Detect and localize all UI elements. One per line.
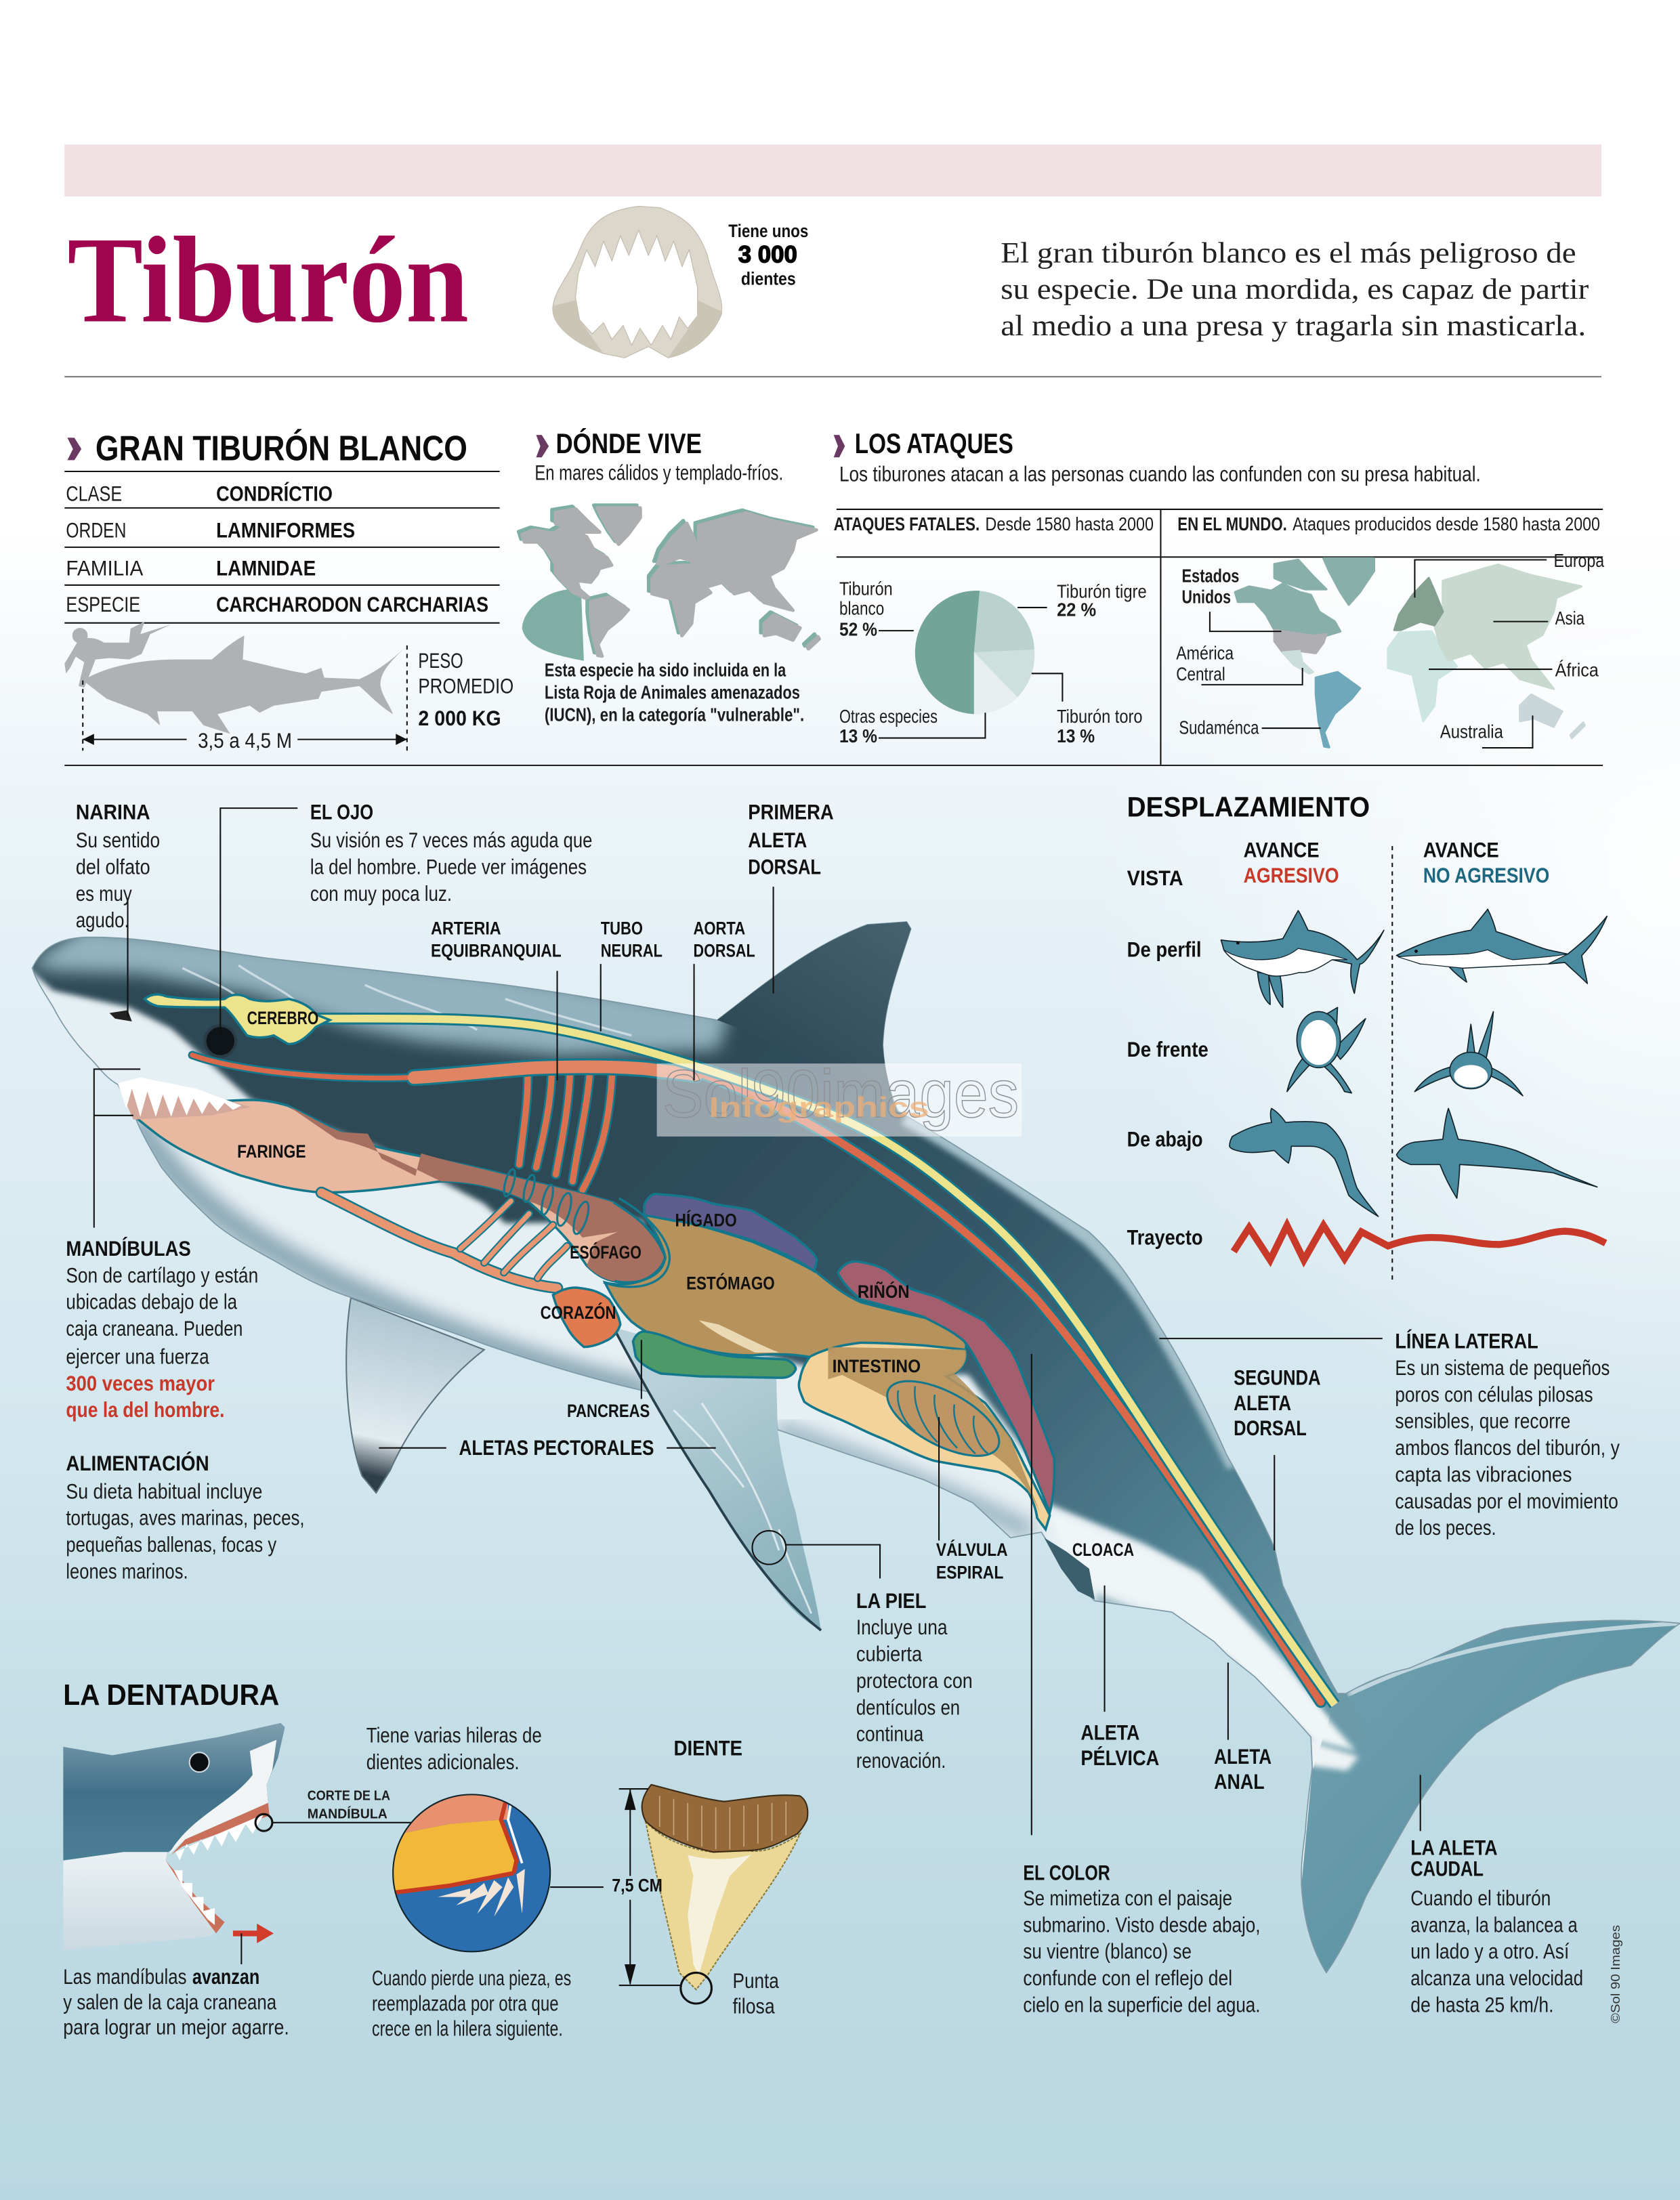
organ: stomach (605, 1215, 966, 1376)
organ: heart (553, 1288, 621, 1347)
column headers: AGRESIVO (1244, 864, 1339, 887)
label: aleta pelvica: PÉLVICA (1080, 1746, 1159, 1770)
subheading: Los tiburones atacan a las personas cuando las confunden con su presa habitual. (839, 463, 1481, 486)
label: tubo neural (601, 918, 663, 961)
row labels: De perfil (1127, 938, 1202, 962)
teeth count note (728, 221, 808, 289)
panel: desplazamiento (1127, 791, 1607, 1279)
heading: LA DENTADURA (63, 1679, 279, 1712)
organ: faringe brown (288, 1105, 664, 1282)
callout: linea lateral: Es un sistema de pequeños (1395, 1356, 1610, 1380)
label: primera aleta dorsal: DORSAL (748, 855, 821, 879)
callout: mandibulas: 300 veces mayor (66, 1372, 215, 1395)
callout: la aleta caudal: de hasta 25 km/h. (1410, 1993, 1554, 2016)
watermark: Sol90images (663, 1057, 1019, 1132)
callout: linea lateral: LÍNEA LATERAL (1395, 1330, 1538, 1353)
callout: la piel (856, 1589, 973, 1773)
row labels: Trayecto (1127, 1225, 1203, 1249)
callout: la aleta caudal (1410, 1836, 1583, 2016)
body outline (33, 922, 1680, 1972)
callout: el color (1023, 1861, 1261, 2016)
callout: alimentacion: Su dieta habitual incluye (66, 1479, 262, 1503)
organ: lower gill arches (321, 1193, 567, 1288)
pie label: tiburon toro: 13 % (1057, 725, 1095, 746)
map labels: Asia (1555, 608, 1584, 629)
organ: kidney (838, 1261, 1055, 1512)
callout: linea lateral (1395, 1330, 1620, 1540)
pie label: otras especies (839, 706, 938, 746)
organ labels: PANCREAS (567, 1401, 650, 1421)
callout: alimentacion: ALIMENTACIÓN (66, 1451, 209, 1475)
tooth text: rows: Tiene varias hileras de (366, 1724, 542, 1748)
label: aleta pelvica (1080, 1721, 1159, 1770)
callout: alimentacion (66, 1451, 305, 1583)
label: valvula espiral (936, 1540, 1008, 1582)
shark head illustration (63, 1723, 285, 1950)
icon: shark jaw (553, 206, 722, 358)
size dimension (83, 646, 407, 753)
callout: linea lateral: sensibles, que recorre (1395, 1410, 1570, 1433)
organ labels: HÍGADO (675, 1210, 737, 1230)
panel: la dentadura (63, 1679, 807, 2041)
text: jaws advance: para lograr un mejor agarre. (63, 2016, 289, 2039)
white rear belly (1050, 1512, 1356, 1751)
text: tooth replacement: crece en la hilera siguiente. (372, 2017, 563, 2041)
teeth count note: Tiene unos (728, 221, 808, 241)
map labels: Estados (1181, 566, 1239, 587)
mouth and teeth (118, 1078, 251, 1120)
red list note (545, 659, 804, 725)
icon: non aggressive front (1414, 1012, 1523, 1096)
heading: DESPLAZAMIENTO (1127, 791, 1370, 823)
callout: mandibulas: MANDÍBULAS (66, 1237, 191, 1261)
row labels: De frente (1127, 1038, 1209, 1061)
callout: alimentacion: leones marinos. (66, 1559, 188, 1583)
pie label: tiburon blanco: 52 % (839, 618, 877, 639)
pie label: tiburon tigre: Tiburón tigre (1057, 580, 1147, 601)
taxonomy table: FAMILIA (66, 556, 144, 580)
weight: PROMEDIO (418, 674, 513, 698)
main shark illustration (0, 898, 1680, 1992)
column headers: AVANCE (1244, 839, 1320, 862)
tooth heading: DIENTE (673, 1736, 742, 1760)
arrow: jaws forward (233, 1924, 274, 1964)
organ: aorta (192, 1055, 1321, 1702)
callout: linea lateral: causadas por el movimiento (1395, 1489, 1618, 1513)
callout: la piel: protectora con (856, 1669, 973, 1693)
attacks world map (1176, 550, 1604, 748)
label: aleta anal: ALETA (1214, 1745, 1272, 1769)
teeth count note: 3 000 (738, 241, 797, 268)
map labels (1176, 550, 1604, 742)
callout: el color: cielo en la superficie del agua. (1023, 1993, 1261, 2016)
teeth count note: dientes (741, 269, 796, 289)
first dorsal fin (717, 922, 911, 1097)
label: aletas pectorales: ALETAS PECTORALES (459, 1436, 654, 1460)
callout: la aleta caudal: avanza, la balancea a (1410, 1913, 1578, 1937)
table header left: Desde 1580 hasta 2000 (985, 513, 1154, 534)
row labels (1127, 938, 1209, 1249)
organ labels (237, 1008, 1134, 1560)
organ: upper gill arches (520, 1076, 612, 1190)
tooth dimension (550, 1789, 681, 1985)
callout: mandibulas (66, 1237, 258, 1422)
map labels: América (1176, 643, 1234, 664)
map labels: Central (1176, 664, 1225, 685)
callout: mandibulas: Son de cartílago y están (66, 1263, 258, 1287)
callout: el ojo: la del hombre. Puede ver imágenes (310, 855, 587, 879)
size dimension: 3,5 a 4,5 M (198, 729, 292, 753)
text: jaws advance (63, 1965, 289, 2039)
pie label: tiburon tigre (1057, 580, 1147, 620)
callout: la piel: Incluye una (856, 1615, 948, 1639)
intro text: su especie. De una mordida, es capaz de partir (1001, 273, 1589, 305)
row labels: De abajo (1127, 1127, 1203, 1151)
organ: faringe (133, 1100, 664, 1282)
label: primera aleta dorsal (748, 801, 834, 879)
callout: la aleta caudal: alcanza una velocidad (1410, 1966, 1583, 1990)
habitat world map (519, 505, 819, 661)
callout: el color: su vientre (blanco) se (1023, 1940, 1192, 1964)
leader lines (94, 808, 1421, 1835)
panel: donde vive (519, 427, 819, 725)
icon: aggressive profile (1221, 910, 1384, 1007)
label: valvula espiral: ESPIRAL (936, 1562, 1003, 1582)
pie label: tiburon toro (1057, 706, 1142, 746)
callout: la piel: renovación. (856, 1749, 946, 1773)
taxonomy table (64, 471, 500, 623)
organ: pancreas (633, 1332, 796, 1378)
pie label: tiburon blanco (839, 578, 893, 639)
pie chart (839, 578, 1147, 746)
label: segunda aleta dorsal: ALETA (1234, 1391, 1291, 1415)
pie label: otras especies: Otras especies (839, 706, 938, 727)
chart: trajectory line (1234, 1225, 1605, 1260)
organ labels: ESÓFAGO (570, 1242, 642, 1263)
taxonomy table: ORDEN (66, 518, 126, 542)
intro text: al medio a una presa y tragarla sin masticarla. (1001, 310, 1586, 342)
table header right: Ataques producidos desde 1580 hasta 2000 (1293, 513, 1600, 534)
label: primera aleta dorsal: PRIMERA (748, 801, 834, 824)
icon: aggressive from below (1230, 1108, 1379, 1217)
jaw marker and connector (255, 1788, 414, 1831)
pie label: tiburon toro: Tiburón toro (1057, 706, 1142, 727)
heading: GRAN TIBURÓN BLANCO (96, 428, 467, 467)
map labels: Europa (1554, 550, 1604, 571)
table header right: EN EL MUNDO. (1177, 513, 1287, 534)
callout: alimentacion: pequeñas ballenas, focas y (66, 1533, 277, 1557)
organ labels: CEREBRO (247, 1008, 318, 1028)
organ: intestine tan band (828, 1347, 1046, 1527)
column headers (1127, 839, 1549, 890)
callout: narina: del olfato (76, 855, 150, 879)
label: tubo neural: NEURAL (601, 941, 663, 961)
column headers: VISTA (1127, 866, 1183, 890)
label: aorta dorsal (693, 918, 755, 961)
label: segunda aleta dorsal: SEGUNDA (1234, 1366, 1321, 1389)
organ: brain and spinal nerve (144, 994, 1335, 1705)
callout: el ojo: Su visión es 7 veces más aguda que (310, 828, 592, 852)
weight: 2 000 KG (418, 706, 501, 730)
red list note: (IUCN), en la categoría "vulnerable". (545, 704, 804, 725)
jaw marker and connector: CORTE DE LA (308, 1788, 390, 1804)
callout: mandibulas: que la del hombre. (66, 1398, 224, 1422)
map labels: Australia (1440, 721, 1503, 742)
map labels: Unidos (1181, 587, 1231, 608)
tooth text: rows: dientes adicionales. (366, 1750, 520, 1774)
icon: chevron (834, 435, 845, 457)
callout: linea lateral: poros con células pilosas (1395, 1382, 1593, 1406)
stomach highlight (699, 1320, 779, 1353)
tooth dimension: 7,5 CM (612, 1875, 663, 1895)
skin marker circle (753, 1531, 786, 1565)
taxonomy table: LAMNIDAE (216, 556, 316, 580)
jaw cross-section circle (392, 1794, 551, 1952)
text: tooth replacement: reemplazada por otra que (372, 1991, 559, 2015)
left pectoral fin (346, 1298, 484, 1493)
tooth tip marker (681, 1969, 779, 2018)
label: primera aleta dorsal: ALETA (748, 828, 807, 852)
pie label: tiburon tigre: 22 % (1057, 599, 1096, 620)
weight: PESO (418, 649, 463, 673)
callout: la aleta caudal: LA ALETA (1410, 1836, 1498, 1859)
icon: chevron (67, 438, 81, 460)
label: aleta anal: ANAL (1214, 1770, 1265, 1794)
label: segunda aleta dorsal (1234, 1366, 1321, 1440)
callout: el color: submarino. Visto desde abajo, (1023, 1913, 1261, 1937)
taxonomy table: ESPECIE (66, 593, 140, 616)
intro text: El gran tiburón blanco es el más peligroso de (1001, 236, 1576, 269)
label: arteria equibranquial (431, 918, 562, 961)
organ: faringe slits (502, 1168, 591, 1235)
column headers: AVANCE (1423, 839, 1499, 862)
callout: la aleta caudal: CAUDAL (1410, 1857, 1484, 1880)
organ: esophagus outline (604, 1198, 669, 1287)
callout: narina: Su sentido (76, 828, 160, 852)
callout: la aleta caudal: un lado y a otro. Así (1410, 1940, 1570, 1964)
map labels: Sudaménca (1179, 717, 1259, 738)
icon: non aggressive from below (1396, 1108, 1597, 1198)
jaw marker and connector: MANDÍBULA (308, 1806, 387, 1822)
label: valvula espiral: VÁLVULA (936, 1540, 1008, 1560)
callout: narina: NARINA (76, 801, 150, 824)
watermark: Infographics (709, 1091, 929, 1123)
callout: el color: confunde con el reflejo del (1023, 1966, 1232, 1990)
callout: narina: agudo. (76, 908, 129, 932)
taxonomy table: LAMNIFORMES (216, 518, 355, 542)
table header left: ATAQUES FATALES. (834, 513, 980, 534)
heading: LOS ATAQUES (855, 427, 1013, 459)
label: aleta anal (1214, 1745, 1272, 1794)
callout: el color: EL COLOR (1023, 1861, 1110, 1885)
shark body (0, 898, 1680, 1992)
weight (418, 649, 513, 730)
pelvic fin dark (1044, 1538, 1095, 1599)
organ labels: CLOACA (1072, 1540, 1134, 1560)
callout: el ojo: con muy poca luz. (310, 882, 452, 906)
callout: la piel: dentículos en (856, 1695, 960, 1719)
taxonomy table: CONDRÍCTIO (216, 482, 333, 505)
icon: non aggressive profile (1396, 909, 1607, 983)
label: segunda aleta dorsal: DORSAL (1234, 1416, 1307, 1440)
text: jaws advance: Las mandíbulas (63, 1965, 187, 1989)
organ labels: FARINGE (237, 1141, 306, 1162)
icon: chevron (536, 435, 549, 457)
label: aleta pelvica: ALETA (1080, 1721, 1139, 1745)
right pectoral fin (613, 1328, 821, 1630)
icon: shark size silhouette (83, 635, 407, 734)
tail (1302, 1621, 1676, 1972)
callout: la piel: cubierta (856, 1643, 923, 1666)
column headers: NO AGRESIVO (1423, 864, 1549, 887)
organ labels: CORAZÓN (541, 1303, 616, 1323)
callout: linea lateral: de los peces. (1395, 1516, 1496, 1540)
pie label: otras especies: 13 % (839, 725, 877, 746)
organ labels: ESTÓMAGO (686, 1273, 775, 1294)
callout: linea lateral: ambos flancos del tiburón, y (1395, 1436, 1620, 1460)
organ: intestine (799, 1342, 1050, 1529)
callout: alimentacion: tortugas, aves marinas, peces, (66, 1506, 305, 1530)
callout: el ojo (310, 801, 592, 906)
label: aorta dorsal: AORTA (693, 918, 745, 939)
pie label: tiburon blanco: Tiburón (839, 578, 893, 599)
icon: diver silhouette (64, 622, 171, 688)
intro text (1001, 236, 1589, 342)
pie label: tiburon blanco: blanco (839, 597, 884, 618)
panel: gran tiburon blanco (64, 428, 513, 753)
organ labels: INTESTINO (833, 1356, 921, 1376)
tooth text: rows (366, 1724, 542, 1774)
label: tubo neural: TUBO (601, 918, 643, 939)
eye (205, 1025, 236, 1057)
text: tooth replacement: Cuando pierde una pieza, es (372, 1966, 571, 1990)
subheading: En mares cálidos y templado-fríos. (534, 461, 783, 484)
taxonomy table: CARCHARODON CARCHARIAS (216, 593, 488, 616)
head lightness (28, 926, 730, 1055)
callout: mandibulas: ejercer una fuerza (66, 1345, 209, 1368)
map labels: África (1555, 659, 1599, 680)
text: tooth replacement (372, 1966, 571, 2041)
title: Tiburón (67, 212, 469, 348)
red list note: Esta especie ha sido incluida en la (545, 659, 786, 680)
callout: mandibulas: ubicadas debajo de la (66, 1290, 238, 1314)
text: jaws advance: y salen de la caja craneana (63, 1990, 277, 2014)
callout: la piel: LA PIEL (856, 1589, 926, 1613)
callout: linea lateral: capta las vibraciones (1395, 1462, 1572, 1486)
nostril (110, 1010, 132, 1021)
callout: narina: es muy (76, 882, 132, 906)
callout: mandibulas: caja craneana. Pueden (66, 1317, 243, 1340)
organ: liver (644, 1194, 817, 1271)
callout: el color: Se mimetiza con el paisaje (1023, 1886, 1232, 1910)
tooth illustration (642, 1785, 807, 1989)
callout: la aleta caudal: Cuando el tiburón (1410, 1886, 1551, 1910)
callout: el ojo: EL OJO (310, 801, 373, 824)
dark dorsal colouring (28, 912, 1368, 1747)
red list note: Lista Roja de Animales amenazados (545, 682, 800, 703)
table header right (1177, 513, 1600, 534)
rear top rim light (905, 1117, 1235, 1466)
callout: narina (76, 801, 160, 932)
taxonomy table: CLASE (66, 482, 122, 505)
label: arteria equibranquial: EQUIBRANQUIAL (431, 941, 562, 961)
header band (64, 144, 1601, 196)
organ labels: RIÑÓN (858, 1282, 910, 1302)
text: jaws advance: avanzan (192, 1965, 259, 1989)
table header left (834, 513, 1154, 534)
label: aorta dorsal: DORSAL (693, 941, 755, 961)
panel: los ataques (834, 427, 1604, 765)
heading: DÓNDE VIVE (555, 427, 702, 459)
organ: spiral valve (876, 1366, 1010, 1471)
callout: la piel: continua (856, 1722, 924, 1746)
tooth tip marker: Punta (733, 1969, 779, 1993)
icon: aggressive front (1287, 1007, 1366, 1093)
tooth tip marker: filosa (733, 1995, 775, 2018)
credit: ©Sol 90 Images (1608, 1925, 1622, 2023)
label: arteria equibranquial: ARTERIA (431, 918, 501, 939)
